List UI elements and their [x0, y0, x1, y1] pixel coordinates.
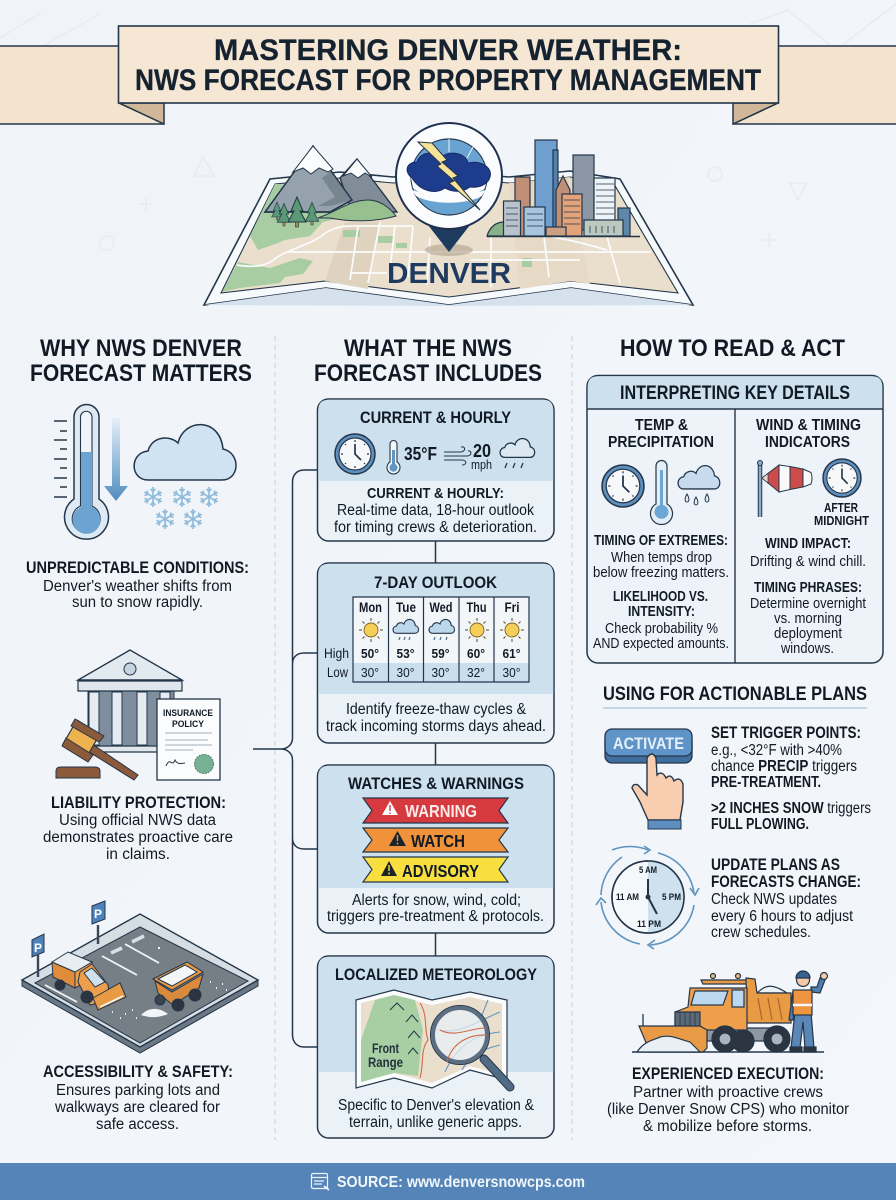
text block: INTENSITY: [628, 603, 695, 620]
watch ribbon: WATCH [411, 831, 465, 851]
text: set trigger points: chance PRECIP triggers [711, 758, 857, 775]
icon: parking lot with plow and spreader [22, 901, 258, 1053]
text block: TIMING PHRASES: [754, 579, 862, 596]
text block: AND expected amounts. [593, 635, 729, 652]
text: experienced execution: (like Denver Snow CPS) who monitor [607, 1101, 849, 1118]
card: watches and warnings [318, 765, 554, 933]
icon: clock with update arrows: 5 PM [662, 892, 681, 903]
forecast table: 30° [361, 665, 379, 680]
subpanel: wind and timing indicators: INDICATORS [765, 434, 850, 451]
heading: WHY NWS DENVER [40, 335, 242, 362]
card text [334, 485, 537, 536]
forecast table: 61° [502, 646, 520, 661]
text: accessibility and safety: walkways are cleared for [54, 1099, 220, 1116]
text: set trigger points: FULL PLOWING. [711, 816, 809, 833]
advisory ribbon: ADVISORY [402, 861, 479, 881]
text: experienced execution [607, 1065, 849, 1135]
terrain map with magnifier: Range [368, 1055, 403, 1070]
card: 7-day outlook [318, 563, 554, 743]
icon: activate button and hand: ACTIVATE [613, 734, 684, 753]
forecast table: Thu [466, 600, 486, 615]
icon: thermometer, falling arrow and snow cloud [54, 405, 236, 539]
icon: courthouse, gavel and insurance policy [56, 650, 220, 780]
icon: clock with update arrows: 5 AM [639, 865, 657, 876]
text: unpredictable conditions: Denver's weather shifts from [43, 578, 232, 595]
text block: vs. morning [774, 610, 842, 627]
text: update plans: Check NWS updates [711, 891, 837, 908]
forecast table: High [324, 646, 349, 661]
warning ribbon [363, 798, 508, 823]
text: liability protection: Using official NWS data [59, 812, 216, 829]
text: set trigger points: >2 INCHES SNOW triggers [711, 800, 871, 817]
card text [327, 892, 544, 925]
card text: Real-time data, 18-hour outlook [337, 502, 534, 519]
forecast table: 50° [361, 646, 379, 661]
forecast table: 53° [396, 646, 414, 661]
forecast table: 60° [467, 646, 485, 661]
icon: browser window [312, 1174, 329, 1190]
parking signs: P [34, 941, 42, 955]
card text: track incoming storms days ahead. [326, 718, 546, 735]
city skyline [487, 140, 640, 236]
icons: clock, thermometer, rain cloud [602, 460, 720, 525]
text: accessibility and safety: ACCESSIBILITY & SAFETY: [43, 1063, 233, 1081]
insurance policy document: INSURANCE [163, 708, 213, 719]
heading: FORECAST INCLUDES [314, 360, 542, 387]
weather readings row: 35°F [404, 444, 437, 464]
text block: below freezing matters. [593, 564, 729, 581]
title: MASTERING DENVER WEATHER: [214, 34, 682, 67]
text: accessibility and safety: Ensures parking lots and [56, 1082, 220, 1099]
weather readings row [335, 434, 535, 474]
icon: clock with update arrows [596, 846, 699, 949]
card text: Alerts for snow, wind, cold; [352, 892, 521, 909]
weather readings row: mph [471, 457, 492, 472]
card text: terrain, unlike generic apps. [349, 1114, 522, 1131]
text: experienced execution: & mobilize before storms. [643, 1118, 812, 1135]
text: liability protection: in claims. [106, 846, 170, 863]
subpanel: wind and timing indicators [750, 417, 869, 657]
column: what the NWS forecast includes [314, 335, 554, 1138]
text: update plans [711, 856, 861, 941]
subpanel: temp and precipitation: PRECIPITATION [608, 434, 714, 451]
title banner [0, 26, 896, 124]
forecast table: 30° [502, 665, 520, 680]
subpanel: temp and precipitation: TEMP & [635, 417, 688, 434]
column: how to read and act [587, 335, 883, 1135]
advisory ribbon [363, 857, 508, 882]
map pin with storm icon [396, 123, 502, 256]
card: watches and warnings: WATCHES & WARNINGS [348, 775, 524, 793]
forecast table: 59° [432, 646, 450, 661]
card: current and hourly [318, 399, 554, 541]
card: localized meteorology [318, 956, 554, 1138]
text block: TIMING OF EXTREMES: [594, 532, 728, 549]
gavel [56, 719, 138, 780]
footer source bar [0, 1163, 896, 1200]
subpanel: wind and timing indicators: WIND & TIMING [756, 417, 861, 434]
icon: activate button and hand [605, 729, 692, 829]
text block: When temps drop [611, 549, 712, 566]
salt spreader truck [153, 962, 203, 1011]
card text: Identify freeze-thaw cycles & [346, 701, 527, 718]
card: localized meteorology: LOCALIZED METEOROLOGY [335, 966, 537, 984]
footer source bar: SOURCE: www.denversnowcps.com [337, 1174, 585, 1191]
card: 7-day outlook: 7-DAY OUTLOOK [374, 574, 497, 592]
icons: windsock, clock: AFTER [824, 500, 858, 515]
icon: clock with update arrows: 11 AM [616, 892, 639, 903]
text: accessibility and safety: safe access. [96, 1116, 179, 1133]
forecast table: 30° [432, 665, 450, 680]
text: liability protection: demonstrates proactive care [43, 829, 233, 846]
panel: interpreting key details [587, 376, 883, 663]
text: liability protection [43, 794, 233, 863]
heading [314, 335, 542, 387]
text: accessibility and safety [43, 1063, 233, 1133]
parking signs [32, 901, 105, 977]
text block: windows. [780, 640, 834, 657]
icon: clock with update arrows: 11 PM [637, 919, 661, 930]
text: experienced execution: EXPERIENCED EXECUTION: [632, 1065, 824, 1083]
text block [750, 535, 867, 657]
icons: windsock, clock: MIDNIGHT [814, 513, 869, 528]
title: NWS FORECAST FOR PROPERTY MANAGEMENT [135, 64, 761, 97]
subpanel: temp and precipitation [593, 417, 729, 652]
text: liability protection: LIABILITY PROTECTION: [51, 794, 226, 812]
heading: FORECAST MATTERS [30, 360, 252, 387]
terrain map with magnifier: Front [372, 1041, 399, 1056]
insurance policy document [157, 699, 220, 780]
text: experienced execution: Partner with proactive crews [633, 1084, 823, 1101]
card: current and hourly: CURRENT & HOURLY [360, 409, 511, 427]
watch ribbon [363, 828, 508, 852]
text: update plans: UPDATE PLANS AS [711, 856, 840, 874]
forecast table: Wed [430, 600, 452, 615]
hero map of Denver [204, 123, 693, 306]
heading: HOW TO READ & ACT [620, 335, 845, 362]
card text: triggers pre-treatment & protocols. [327, 908, 544, 925]
forecast table: Tue [396, 600, 416, 615]
text: update plans: crew schedules. [711, 924, 811, 941]
parking signs: P [94, 907, 102, 921]
card text: CURRENT & HOURLY: [367, 485, 504, 502]
forecast table: 32° [467, 665, 485, 680]
weather readings row: 20 [473, 441, 491, 461]
card text: for timing crews & deterioration. [334, 519, 537, 536]
text: set trigger points [711, 724, 871, 833]
forecast table [324, 597, 529, 682]
text: update plans: every 6 hours to adjust [711, 908, 854, 925]
section: using for actionable plans [596, 683, 871, 1135]
forecast table: Low [327, 665, 348, 680]
card text: Specific to Denver's elevation & [338, 1097, 535, 1114]
terrain map with magnifier [356, 990, 510, 1088]
heading: WHAT THE NWS [344, 335, 512, 362]
forecast table: Fri [504, 600, 520, 615]
folded map [204, 171, 693, 306]
plow truck [52, 952, 126, 1010]
text block: Determine overnight [750, 595, 867, 612]
text block [593, 532, 729, 652]
icon: snow plow truck and worker [632, 971, 828, 1052]
text: unpredictable conditions: UNPREDICTABLE CONDITIONS: [26, 559, 249, 577]
text block: LIKELIHOOD VS. [613, 588, 708, 605]
text block: deployment [774, 625, 843, 642]
bracket connector [253, 470, 436, 1047]
text: unpredictable conditions [26, 559, 249, 611]
worker [789, 971, 828, 1052]
mountains and trees [265, 146, 397, 227]
forecast table: 30° [396, 665, 414, 680]
text: update plans: FORECASTS CHANGE: [711, 873, 861, 891]
map label: Denver: DENVER [387, 258, 511, 290]
warning ribbon: WARNING [405, 801, 477, 821]
text block: Check probability % [605, 620, 718, 637]
text block: Drifting & wind chill. [750, 553, 866, 570]
text: set trigger points: SET TRIGGER POINTS: [711, 724, 861, 742]
text: set trigger points: PRE-TREATMENT. [711, 774, 821, 791]
heading [30, 335, 252, 387]
column: why NWS Denver forecast matters [22, 335, 258, 1133]
text: set trigger points: e.g., <32°F with >40% [711, 742, 842, 759]
panel: interpreting key details: INTERPRETING KEY DETAILS [620, 383, 850, 404]
icons: windsock, clock [758, 459, 869, 528]
forecast table: Mon [359, 600, 382, 615]
insurance policy document: POLICY [172, 719, 205, 730]
title [135, 34, 761, 97]
text: unpredictable conditions: sun to snow rapidly. [72, 594, 203, 611]
card text [326, 701, 546, 735]
card text [338, 1097, 535, 1131]
text block: WIND IMPACT: [765, 535, 851, 552]
